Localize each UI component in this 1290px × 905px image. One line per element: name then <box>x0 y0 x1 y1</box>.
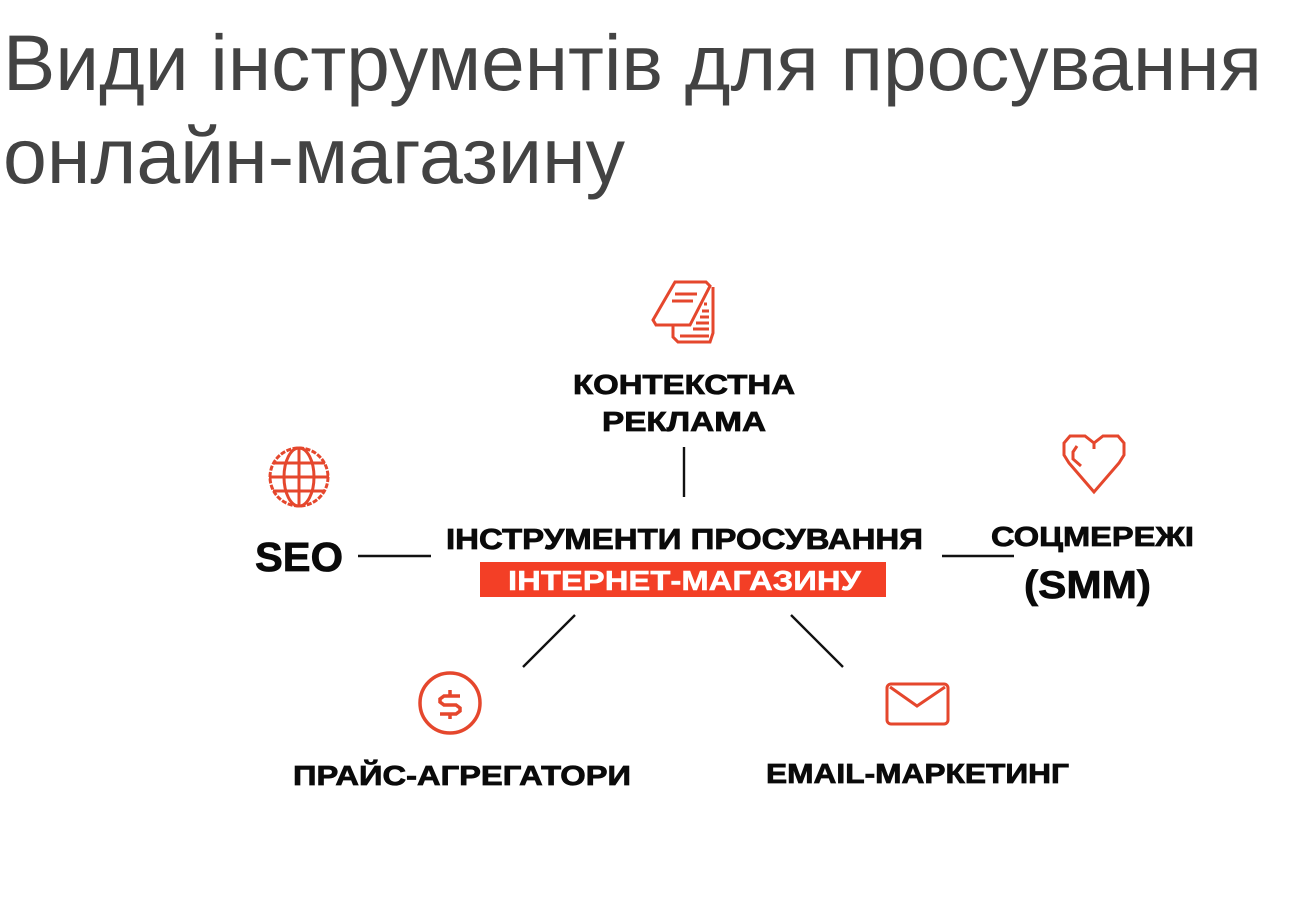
icon: globe <box>269 447 329 507</box>
label: social media: СОЦМЕРЕЖІ <box>991 521 1194 552</box>
icon: dollar coin <box>420 673 480 733</box>
label: context advertising: КОНТЕКСТНА <box>573 369 795 400</box>
label: context advertising <box>573 369 795 437</box>
label: email marketing: EMAIL-МАРКЕТИНГ <box>766 758 1069 789</box>
label: price aggregators: ПРАЙС-АГРЕГАТОРИ <box>293 759 631 791</box>
label: social media: (SMM) <box>1024 564 1151 607</box>
icon: heart <box>1064 436 1124 492</box>
icon: envelope <box>887 684 948 724</box>
label: SEO: SEO <box>255 534 343 580</box>
center heading: ІНСТРУМЕНТИ ПРОСУВАННЯ <box>446 524 923 556</box>
title: Види інструментів для просування <box>3 18 1262 107</box>
center banner <box>480 562 886 597</box>
connector: left <box>358 555 431 557</box>
connector: bottom left <box>523 615 575 667</box>
connector: right <box>942 555 1014 557</box>
connector: top <box>683 447 685 497</box>
label: context advertising: РЕКЛАМА <box>602 406 766 437</box>
label: social media <box>991 521 1194 607</box>
title: онлайн-магазину <box>3 111 625 200</box>
center banner: ІНТЕРНЕТ-МАГАЗИНУ <box>508 565 862 596</box>
icon: notepad <box>653 282 713 342</box>
title <box>3 18 1262 200</box>
connector: bottom right <box>791 615 843 667</box>
